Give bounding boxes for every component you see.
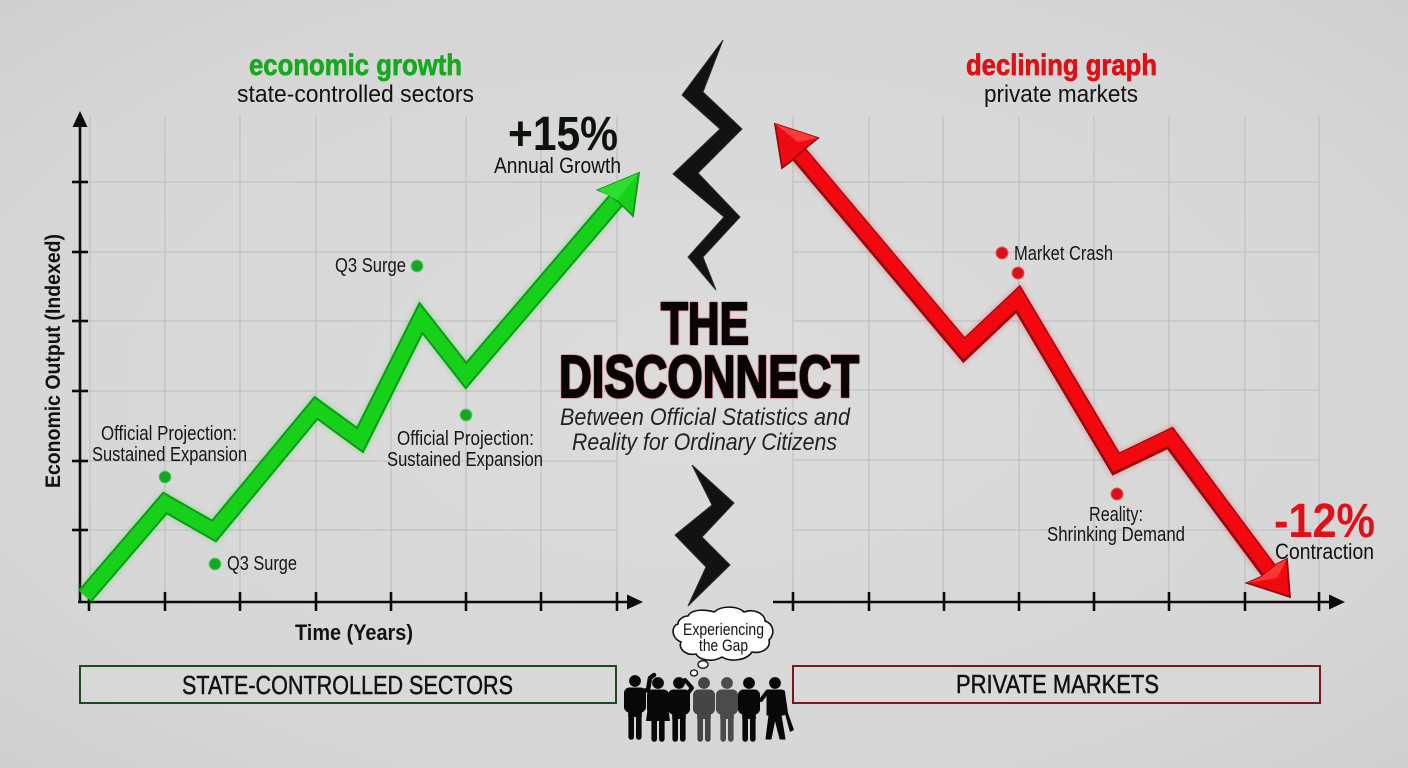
heading: declining graph — [966, 49, 1157, 108]
subtitle — [560, 404, 851, 456]
grey person right — [716, 678, 738, 739]
heading: declining graph: private markets — [984, 81, 1138, 108]
icon: bottom crack bolt — [675, 465, 734, 606]
icon: top crack bolt — [673, 40, 742, 290]
title: the disconnect: DISCONNECT — [559, 344, 859, 410]
person standing — [738, 678, 760, 739]
heading: economic growth: state-controlled sectors — [237, 81, 474, 108]
title: the disconnect — [559, 291, 859, 410]
icon: thought bubble: Experiencing — [683, 621, 764, 639]
annotation: official projection 1: Official Projection: — [101, 423, 237, 445]
heading: declining graph: declining graph — [966, 49, 1157, 82]
legend box: private markets — [793, 666, 1320, 703]
green growth arrow — [85, 173, 639, 596]
legend box: state-controlled sectors: STATE-CONTROLLED SECTORS — [182, 672, 513, 700]
legend box: private markets: PRIVATE MARKETS — [956, 671, 1159, 699]
annotation: official projection 2: Official Projection: — [397, 428, 534, 450]
panel: left chart — [42, 108, 643, 645]
panel: right chart — [773, 116, 1375, 611]
person touching head — [668, 678, 692, 739]
y axis title: Economic Output (Indexed) — [42, 234, 65, 488]
heading: economic growth — [237, 49, 474, 108]
annotation: official projection 2: Sustained Expansion — [387, 449, 543, 471]
heading: economic growth: economic growth — [249, 49, 462, 82]
icon: group of citizens — [624, 675, 794, 739]
annotation: market crash: Market Crash — [1014, 243, 1113, 265]
annotation: Q3 surge low — [209, 553, 297, 575]
icon: thought bubble — [673, 607, 773, 676]
annotation: Q3 surge high: Q3 Surge — [335, 255, 406, 277]
legend box: state-controlled sectors — [80, 666, 616, 703]
x axis title: Time (Years) — [295, 620, 413, 645]
title: the disconnect: THE — [661, 291, 749, 357]
annotation: official projection 2 — [387, 409, 543, 471]
annotation: Q3 surge low: Q3 Surge — [227, 553, 297, 575]
annotation: official projection 1 — [92, 423, 247, 483]
red decline arrow — [775, 124, 1290, 597]
left chart axes — [72, 111, 643, 611]
person raising arm — [624, 675, 654, 737]
callout: contraction: Contraction — [1275, 539, 1374, 564]
icon: thought bubble: the Gap — [699, 636, 748, 655]
annotation: shrinking demand: Reality: — [1089, 504, 1143, 526]
callout: annual growth — [494, 108, 621, 178]
annotation: shrinking demand: Shrinking Demand — [1047, 524, 1185, 546]
annotation: market crash — [996, 243, 1113, 279]
callout: annual growth: +15% — [508, 108, 618, 161]
subtitle: Reality for Ordinary Citizens — [572, 429, 837, 456]
annotation: shrinking demand — [1047, 488, 1185, 546]
person in dress — [646, 678, 670, 739]
callout: contraction: -12% — [1274, 495, 1375, 548]
grey person left — [693, 678, 715, 739]
subtitle: Between Official Statistics and — [560, 404, 851, 431]
right chart axis — [773, 592, 1345, 611]
annotation: official projection 1: Sustained Expansion — [92, 444, 247, 466]
callout: annual growth: Annual Growth — [494, 153, 621, 178]
person with briefcase — [761, 678, 794, 739]
